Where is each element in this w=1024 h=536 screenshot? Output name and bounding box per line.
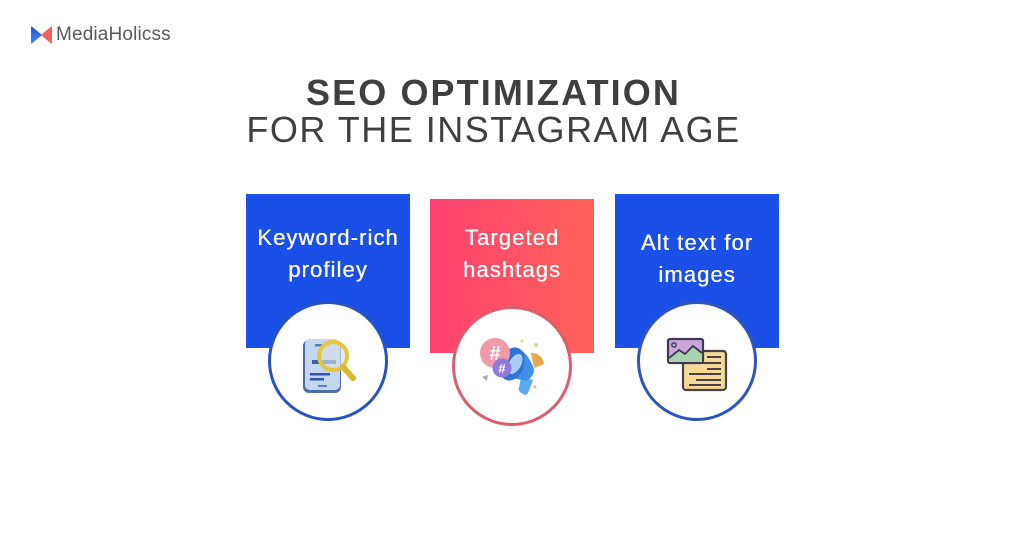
icon circle xyxy=(268,301,388,421)
panel: keyword-rich profile xyxy=(246,194,410,421)
panel: targeted hashtags xyxy=(430,199,594,426)
icon circle xyxy=(637,301,757,421)
icon: picture and text note xyxy=(666,338,728,392)
logo wordmark: MediaHolicss xyxy=(56,24,171,45)
title line 1: SEO OPTIMIZATION xyxy=(306,72,681,113)
icon circle xyxy=(452,306,572,426)
panel background xyxy=(615,194,779,348)
logo mark xyxy=(31,26,52,44)
icon: document with magnifier xyxy=(303,339,356,393)
panel text xyxy=(463,225,561,282)
panel: alt text for images xyxy=(615,194,779,421)
panel gradient background xyxy=(430,199,594,353)
icon: megaphone with hashtags: # xyxy=(498,361,506,376)
icon: megaphone with hashtags: # xyxy=(489,343,501,365)
panel text: Targeted xyxy=(465,225,559,250)
panel text xyxy=(641,230,753,287)
panel text xyxy=(257,225,399,282)
panel text: Alt text for xyxy=(641,230,753,255)
title line 2: FOR THE INSTAGRAM AGE xyxy=(246,109,741,150)
title xyxy=(246,72,741,150)
panel background xyxy=(246,194,410,348)
panel text: hashtags xyxy=(463,257,561,282)
panel text: images xyxy=(658,262,736,287)
panel text: Keyword-rich xyxy=(257,225,399,250)
logo xyxy=(31,24,171,45)
icon: megaphone with hashtags xyxy=(480,338,544,395)
panel text: profiley xyxy=(288,257,368,282)
